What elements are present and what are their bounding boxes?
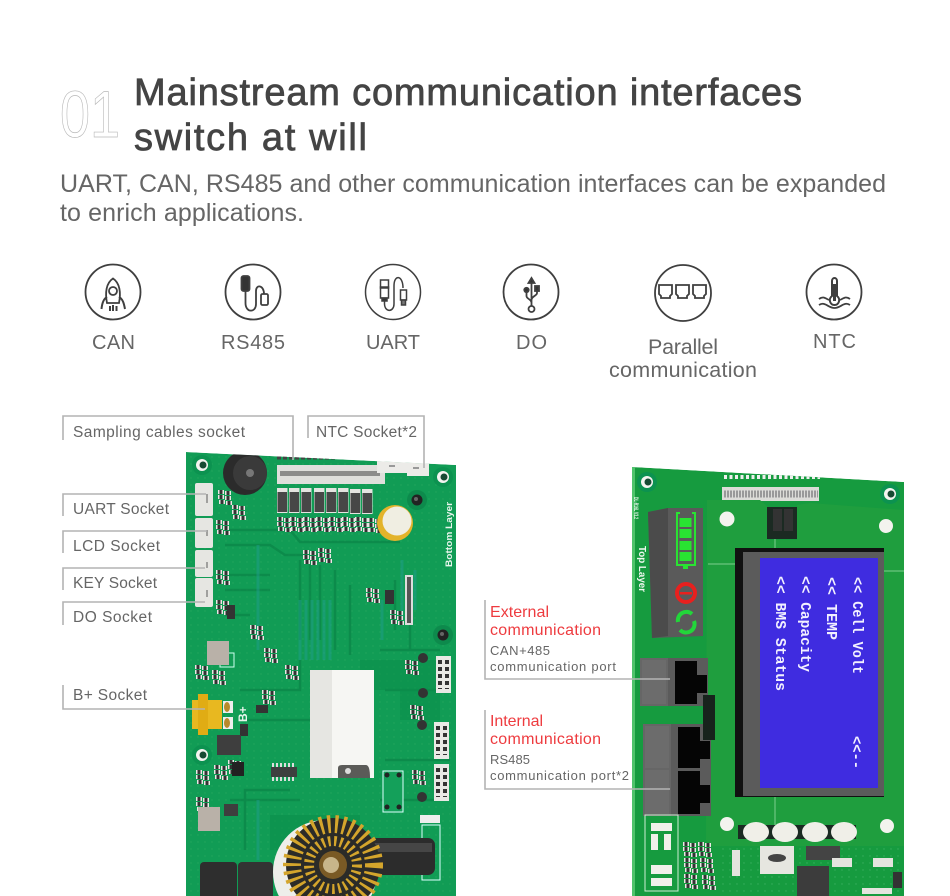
LCD menu text: << TEMP — [822, 577, 838, 640]
left sockets — [195, 483, 213, 607]
callout: sampling cables socket: Sampling cables socket — [73, 424, 246, 441]
silkscreen top layer: Top Layer — [636, 546, 647, 592]
lower board components — [683, 842, 902, 896]
callout: external communication: communication port — [490, 659, 616, 674]
callout: sampling cables socket — [63, 416, 293, 460]
coin cell capacitor — [377, 505, 413, 541]
power indicator — [677, 584, 695, 602]
MOSFET row — [277, 488, 382, 533]
upper display carrier board — [706, 500, 904, 846]
label: CAN: CAN — [92, 332, 135, 354]
label: NTC: NTC — [813, 331, 856, 353]
buzzer — [223, 451, 267, 495]
callout: KEY socket — [63, 568, 205, 592]
subtitle text — [60, 170, 886, 227]
black capacitors bottom — [200, 862, 273, 896]
board silkscreen — [236, 502, 455, 722]
mounting holes — [192, 455, 453, 765]
board traces — [225, 530, 450, 850]
jumper block — [645, 815, 678, 891]
toroid inductor — [273, 818, 380, 896]
callout: UART socket: UART Socket — [73, 501, 170, 518]
subtitle text: to enrich applications. — [60, 199, 304, 227]
callout: internal communication: communication port*2 — [490, 768, 629, 783]
NTC connectors — [377, 461, 429, 476]
label: Parallel communication — [609, 335, 757, 382]
callout: B+ socket: B+ Socket — [73, 687, 148, 704]
silkscreen top layer — [634, 497, 646, 592]
subtitle text: UART, CAN, RS485 and other communication interfaces can be expanded — [60, 170, 886, 198]
label: Parallel communication: communication — [609, 358, 757, 382]
refresh indicator — [678, 612, 695, 633]
white relay block — [310, 670, 374, 778]
callout: LCD socket — [63, 531, 207, 555]
LCD menu text — [771, 576, 864, 769]
callout: external communication: CAN+485 — [490, 643, 550, 658]
icon: UART USB cable — [366, 264, 420, 320]
push buttons — [738, 822, 857, 842]
callout: NTC socket: NTC Socket*2 — [316, 424, 417, 441]
power IC packages — [217, 735, 244, 816]
label: RS485: RS485 — [221, 332, 285, 354]
icon: NTC thermometer — [806, 264, 862, 320]
bottom area dotted ground — [722, 848, 899, 892]
callout: B+ socket — [63, 685, 205, 709]
callout: internal communication: communication — [490, 731, 601, 748]
heading: switch at will — [134, 117, 367, 159]
B+ yellow connector — [192, 694, 233, 735]
callout: internal communication: RS485 — [490, 752, 530, 767]
callout: external communication — [485, 600, 670, 679]
board silkscreen: Bottom Layer — [444, 502, 455, 567]
callout: internal communication: Internal — [490, 713, 543, 730]
icon: CAN rocket — [86, 264, 140, 320]
LCD display — [735, 548, 884, 797]
callout: KEY socket: KEY Socket — [73, 575, 158, 592]
label: Parallel communication: Parallel — [648, 335, 718, 359]
title block — [60, 72, 802, 159]
LCD menu text: << Capacity — [796, 576, 812, 672]
header pins strip — [722, 475, 820, 503]
RJ45 internal ports — [643, 695, 715, 816]
panel: bottom layer circuit board — [186, 451, 456, 896]
callout: UART socket — [63, 494, 206, 518]
callout: internal communication — [485, 710, 670, 789]
indicator panel — [648, 508, 703, 638]
icon: DO USB symbol — [504, 264, 558, 320]
label: UART: UART — [366, 332, 420, 354]
battery indicator — [676, 512, 696, 569]
label: DO: DO — [516, 332, 547, 354]
black capacitor right — [370, 838, 435, 875]
callout: LCD socket: LCD Socket — [73, 538, 161, 555]
carrier board traces — [708, 520, 904, 830]
LCD menu text: << BMS Status — [771, 576, 787, 691]
sampling cable connector — [277, 458, 385, 484]
heading — [134, 72, 802, 159]
panel: top layer circuit board — [632, 467, 904, 896]
small mosfets on carrier — [767, 507, 797, 539]
callout: external communication: communication — [490, 622, 601, 639]
mounting holes — [637, 472, 900, 504]
LCD menu text: <<-- — [847, 736, 863, 769]
icon: parallel communication ports — [655, 265, 711, 321]
inductors — [198, 641, 229, 831]
small components — [195, 490, 426, 812]
heading: Mainstream communication interfaces — [134, 72, 802, 114]
silkscreen top layer: DL-R16L V3.2 — [632, 497, 639, 519]
white posts — [720, 512, 894, 833]
callout: DO socket: DO Socket — [73, 609, 153, 626]
right side headers and parts — [383, 653, 451, 880]
interface icon row — [86, 264, 862, 382]
board silkscreen: B+ — [236, 706, 250, 722]
icon: RS485 cable — [226, 264, 280, 320]
LCD menu text: << Cell Volt — [848, 577, 864, 674]
callout: NTC socket — [308, 416, 424, 468]
callout: DO socket — [63, 602, 205, 626]
RJ45 external port — [640, 658, 708, 706]
callout: external communication: External — [490, 604, 549, 621]
section number 01: 01 — [60, 77, 120, 151]
